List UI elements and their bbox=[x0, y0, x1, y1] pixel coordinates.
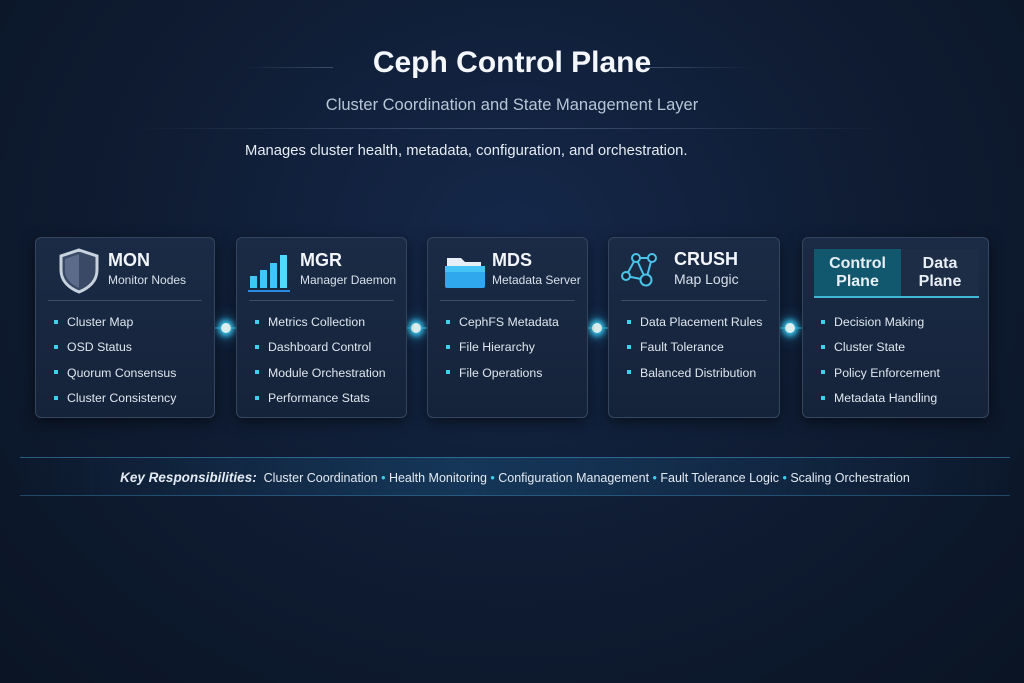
panel: MGR: Metrics Collection bbox=[268, 315, 365, 329]
panel: CRUSH: CRUSH bbox=[674, 249, 738, 269]
panel: CRUSH bbox=[608, 237, 780, 418]
panel: MDS: File Hierarchy bbox=[459, 340, 535, 354]
title: Ceph Control Plane bbox=[373, 46, 651, 79]
icon: bar chart bbox=[248, 255, 290, 292]
panel: MON: OSD Status bbox=[67, 340, 132, 354]
panel: control vs data plane bbox=[802, 237, 989, 418]
panel: MGR bbox=[236, 237, 407, 418]
panel: MON bbox=[35, 237, 215, 418]
tab header: Plane bbox=[919, 273, 961, 290]
icon: shield bbox=[60, 248, 98, 294]
icon: network graph bbox=[621, 253, 657, 286]
responsibilities bar bbox=[20, 457, 1010, 496]
panel: CRUSH: Map Logic bbox=[674, 271, 739, 287]
panel: MON: MON bbox=[108, 250, 150, 270]
panel: MON: Cluster Consistency bbox=[67, 391, 176, 405]
panel: MDS: CephFS Metadata bbox=[459, 315, 559, 329]
description: Manages cluster health, metadata, configuration, and orchestration. bbox=[245, 143, 688, 159]
panel: MON: Cluster Map bbox=[67, 315, 133, 329]
subtitle: Cluster Coordination and State Management Layer bbox=[326, 96, 698, 114]
panel: MGR: Dashboard Control bbox=[268, 340, 371, 354]
panel: MDS bbox=[427, 237, 588, 418]
panel: MGR: Performance Stats bbox=[268, 391, 370, 405]
panel: MON: Monitor Nodes bbox=[108, 273, 186, 287]
panel: control vs data plane: Policy Enforcement bbox=[834, 366, 940, 380]
tab header: Control bbox=[829, 255, 886, 272]
icon: folder bbox=[445, 258, 485, 288]
responsibilities bar: Key Responsibilities: Cluster Coordination • Health Monitoring • Configuration Management • Fault Tolerance Logic • Scaling Orchestration bbox=[120, 470, 910, 485]
panel: CRUSH: Balanced Distribution bbox=[640, 366, 756, 380]
panel: CRUSH: Data Placement Rules bbox=[640, 315, 762, 329]
tab header: Plane bbox=[836, 273, 879, 290]
panel: control vs data plane: Cluster State bbox=[834, 340, 905, 354]
panel: MDS: File Operations bbox=[459, 366, 542, 380]
panel: control vs data plane: Metadata Handling bbox=[834, 391, 937, 405]
panel: CRUSH: Fault Tolerance bbox=[640, 340, 724, 354]
tab header: Data bbox=[923, 255, 957, 272]
tab header bbox=[814, 249, 979, 298]
panel: MGR: MGR bbox=[300, 250, 342, 270]
panel: MDS: Metadata Server bbox=[492, 273, 581, 287]
panel: MDS: MDS bbox=[492, 250, 532, 270]
panel: MGR: Module Orchestration bbox=[268, 366, 386, 380]
panel: MON: Quorum Consensus bbox=[67, 366, 176, 380]
connectors bbox=[215, 311, 802, 345]
panel: MGR: Manager Daemon bbox=[300, 273, 396, 287]
panel: control vs data plane: Decision Making bbox=[834, 315, 924, 329]
